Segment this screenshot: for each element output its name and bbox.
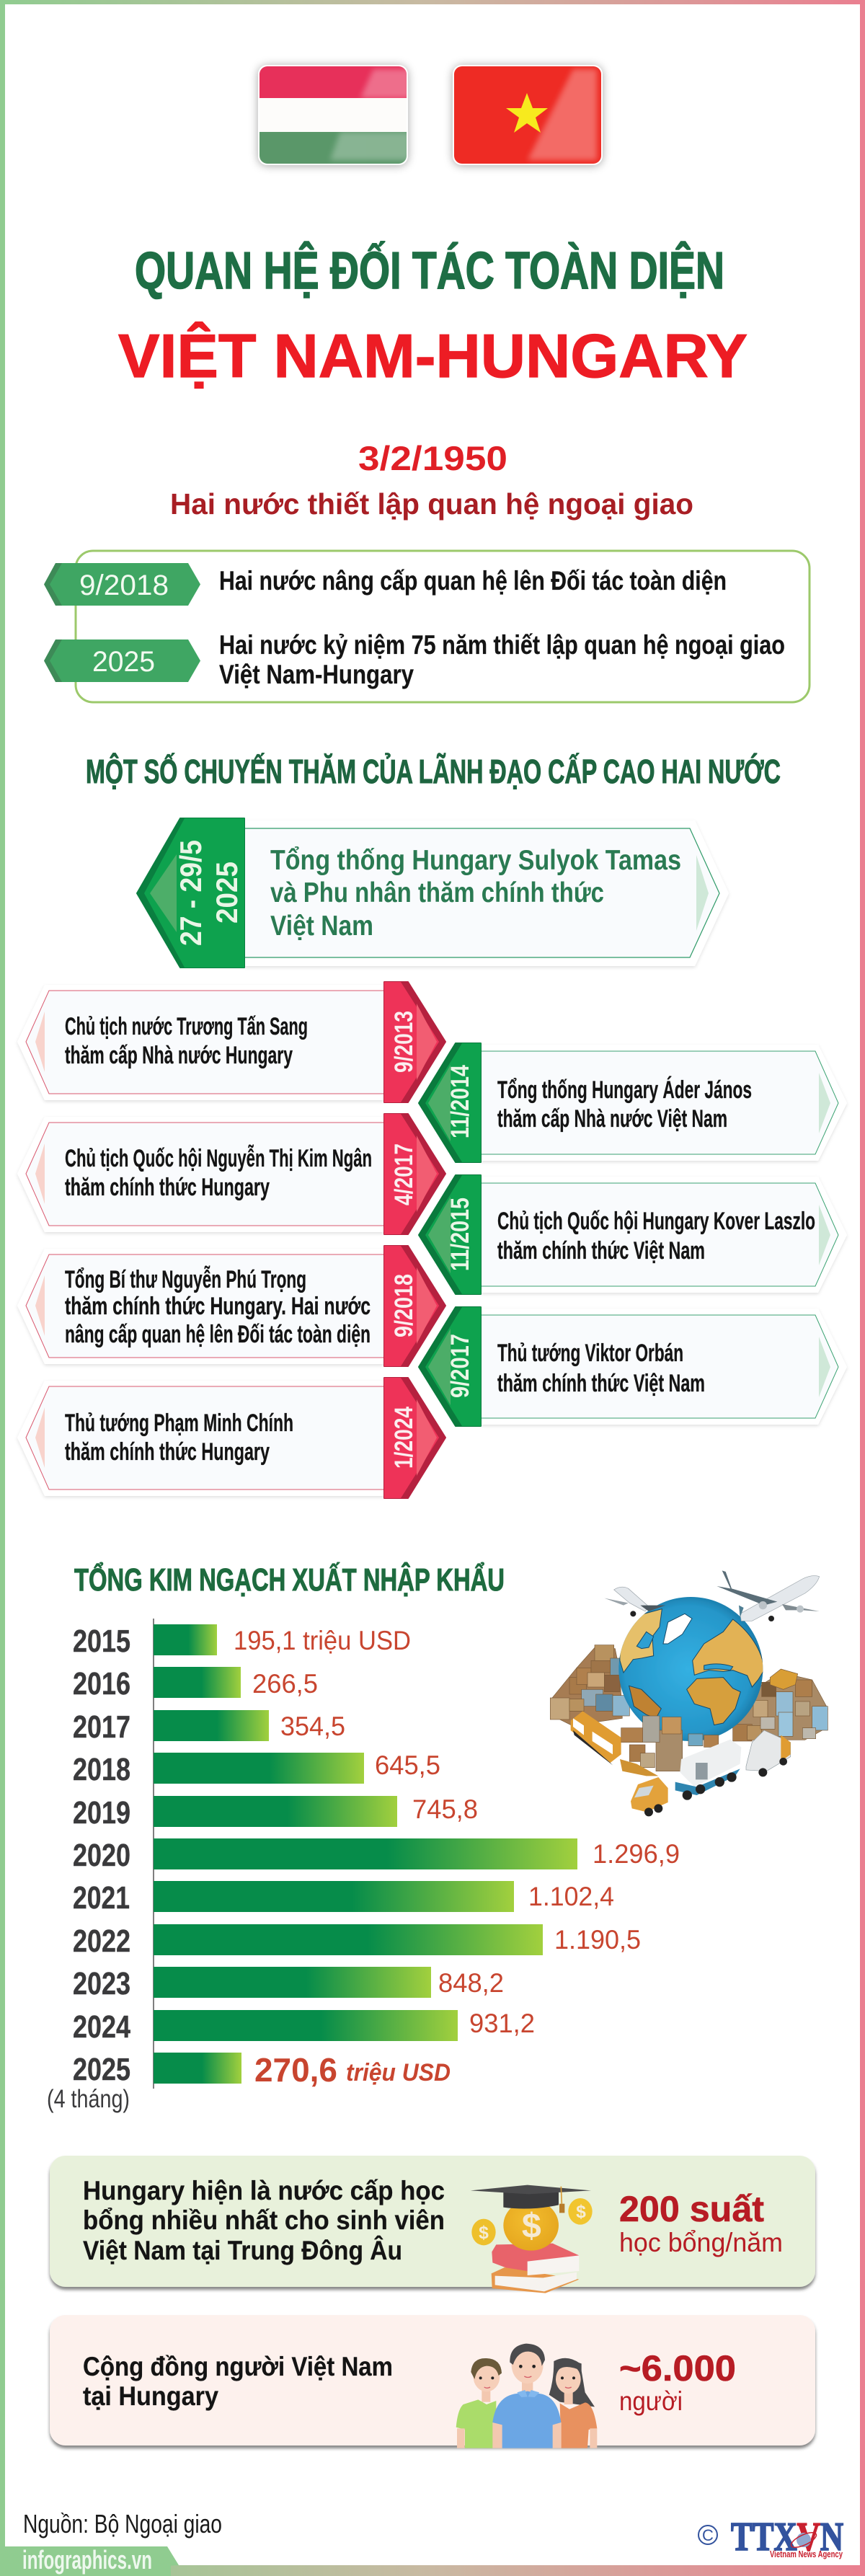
left pile of boxes	[550, 1645, 629, 1725]
visit card: 11/2015: 11/2015	[446, 1198, 474, 1271]
year labels: 2015	[73, 1624, 130, 1659]
logo: TTXVN: C	[702, 2526, 714, 2544]
value labels: 354,5	[280, 1712, 345, 1741]
value labels: triệu USD	[346, 2059, 451, 2086]
visit card: 9/2013: Chủ tịch nước Trương Tấn Sang	[65, 1013, 308, 1040]
community text: Cộng đồng người Việt Nam	[83, 2352, 393, 2381]
panel: milestones	[44, 551, 809, 702]
visit card: 4/2017: Chủ tịch Quốc hội Nguyễn Thị Kim Ngân	[65, 1145, 372, 1172]
footer tab: infographics.vn: infographics.vn	[22, 2545, 152, 2575]
milestone text	[219, 566, 785, 689]
year labels: 2020	[73, 1838, 130, 1873]
community text: tại Hungary	[83, 2381, 218, 2411]
label: 9/2018	[44, 563, 200, 606]
scholarship figure: học bổng/năm	[619, 2228, 783, 2257]
year labels	[47, 1624, 130, 2113]
year labels: 2024	[73, 2009, 130, 2045]
truck: yellow cab	[631, 1777, 668, 1816]
visit card: 1/2024: Thủ tướng Phạm Minh Chính	[65, 1409, 293, 1437]
visit card: 1/2024: 1/2024	[390, 1407, 418, 1469]
visit card: 9/2018: 9/2018	[390, 1274, 418, 1337]
milestone text: Việt Nam-Hungary	[219, 660, 414, 689]
scholarship text: bổng nhiều nhất cho sinh viên	[83, 2205, 445, 2235]
truck: white	[675, 1740, 741, 1800]
icon: graduation cap, coins and books: $	[479, 2223, 489, 2243]
community text	[83, 2352, 393, 2411]
visit card: 9/2017: 9/2017	[446, 1334, 474, 1398]
panel: featured visit 27-29/5/2025	[137, 818, 729, 968]
value labels: 1.190,5	[554, 1925, 641, 1955]
center pile	[621, 1716, 719, 1771]
value labels: 266,5	[252, 1669, 318, 1699]
panel: featured visit 27-29/5/2025: và Phu nhân thăm chính thức	[270, 877, 604, 908]
panel: featured visit 27-29/5/2025: Tổng thống Hungary Sulyok Tamas	[270, 845, 681, 876]
community figure	[619, 2348, 736, 2416]
scholarship figure	[619, 2189, 783, 2257]
visit card: 11/2015	[419, 1175, 847, 1294]
value labels: 1.102,4	[528, 1882, 614, 1911]
value labels: 848,2	[438, 1968, 504, 1998]
logo: TTXVN: TTXVN	[731, 2515, 843, 2559]
year labels: 2016	[73, 1666, 130, 1701]
scholarship figure: 200 suất	[619, 2189, 764, 2229]
icon: graduation cap, coins and books: $	[576, 2203, 586, 2222]
value labels: 270,6	[254, 2051, 337, 2089]
label: 2025: 2025	[92, 646, 155, 678]
globe	[618, 1597, 764, 1741]
heading: trade: TỔNG KIM NGẠCH XUẤT NHẬP KHẨU	[74, 1561, 505, 1598]
icon: graduation cap, coins and books	[471, 2185, 593, 2293]
panel: scholarship	[50, 2156, 815, 2293]
panel: community	[50, 2315, 815, 2448]
label: 9/2018: 9/2018	[79, 570, 169, 601]
visit card: 4/2017: 4/2017	[390, 1143, 418, 1205]
right pile of boxes	[733, 1669, 828, 1741]
year labels: 2019	[73, 1795, 130, 1831]
visit card: 11/2015: thăm chính thức Việt Nam	[497, 1237, 705, 1265]
plane: large	[717, 1570, 820, 1621]
visit card: 9/2018	[17, 1246, 445, 1366]
year labels: 2021	[73, 1880, 130, 1916]
panel: featured visit 27-29/5/2025: 27 - 29/5	[174, 840, 208, 946]
plane: small	[604, 1587, 665, 1616]
scholarship text: Việt Nam tại Trung Đông Âu	[83, 2235, 402, 2265]
value labels	[234, 1626, 680, 2089]
community figure: ~6.000	[619, 2348, 736, 2389]
value labels: 1.296,9	[593, 1839, 680, 1869]
visit card: 9/2013: 9/2013	[390, 1011, 418, 1073]
visit card: 9/2013	[17, 982, 445, 1102]
man	[492, 2344, 562, 2448]
label: 2025	[44, 639, 200, 682]
visit card: 4/2017: thăm chính thức Hungary	[65, 1174, 270, 1201]
source: Nguồn: Bộ Ngoại giao	[23, 2509, 222, 2539]
visit card: 11/2014	[419, 1043, 847, 1162]
title	[118, 241, 748, 391]
woman	[549, 2358, 597, 2448]
bars	[154, 1624, 577, 2084]
value labels: 931,2	[469, 2009, 535, 2038]
date: 3/2/1950: Hai nước thiết lập quan hệ ngoại giao	[170, 487, 693, 521]
value labels: 645,5	[375, 1750, 440, 1780]
year labels: 2017	[73, 1709, 130, 1745]
year labels: 2018	[73, 1752, 130, 1787]
year labels: 2025	[73, 2052, 130, 2087]
visit card: 1/2024	[17, 1378, 445, 1498]
year labels: 2022	[73, 1924, 130, 1959]
milestone text: Hai nước nâng cấp quan hệ lên Đối tác toàn diện	[219, 566, 727, 596]
date: 3/2/1950: 3/2/1950	[358, 439, 507, 477]
visit card: 4/2017	[17, 1114, 445, 1234]
visit card: 9/2018: Tổng Bí thư Nguyễn Phú Trọng	[65, 1266, 306, 1293]
truck: orange container	[571, 1711, 658, 1776]
truck: white right	[746, 1730, 791, 1776]
visit card: 9/2018: thăm chính thức Hungary. Hai nước	[65, 1293, 371, 1320]
visit card: 9/2017: thăm chính thức Việt Nam	[497, 1370, 705, 1397]
year labels: (4 tháng)	[47, 2085, 130, 2113]
illustration: globe, planes and trucks	[550, 1570, 828, 1816]
visit card: 9/2013: thăm cấp Nhà nước Hungary	[65, 1042, 293, 1069]
visit card: 11/2014: thăm cấp Nhà nước Việt Nam	[497, 1105, 727, 1133]
scholarship text: Hungary hiện là nước cấp học	[83, 2176, 445, 2205]
visit card: 11/2014: 11/2014	[446, 1065, 474, 1138]
bar chart: trade turnover	[47, 1619, 680, 2113]
year labels: 2023	[73, 1966, 130, 2001]
icon: Hungary flag	[258, 65, 412, 165]
value labels: 195,1 triệu USD	[234, 1626, 411, 1655]
title: VIỆT NAM-HUNGARY	[118, 322, 748, 391]
date: 3/2/1950	[170, 439, 693, 521]
icon: three people	[456, 2344, 597, 2448]
icon: Vietnam flag	[453, 65, 603, 165]
visit card: 1/2024: thăm chính thức Hungary	[65, 1438, 270, 1466]
boy	[456, 2358, 502, 2448]
visit card: 9/2017	[419, 1307, 847, 1426]
scholarship text	[83, 2176, 445, 2265]
panel: featured visit 27-29/5/2025: Việt Nam	[270, 911, 373, 942]
community figure: người	[619, 2386, 683, 2416]
icon: graduation cap, coins and books: $	[522, 2206, 541, 2245]
visit card: 9/2018: nâng cấp quan hệ lên Đối tác toàn diện	[65, 1321, 371, 1348]
panel: featured visit 27-29/5/2025: 2025	[210, 862, 244, 924]
visit card: 9/2017: Thủ tướng Viktor Orbán	[497, 1340, 683, 1367]
value labels: 745,8	[412, 1794, 478, 1824]
